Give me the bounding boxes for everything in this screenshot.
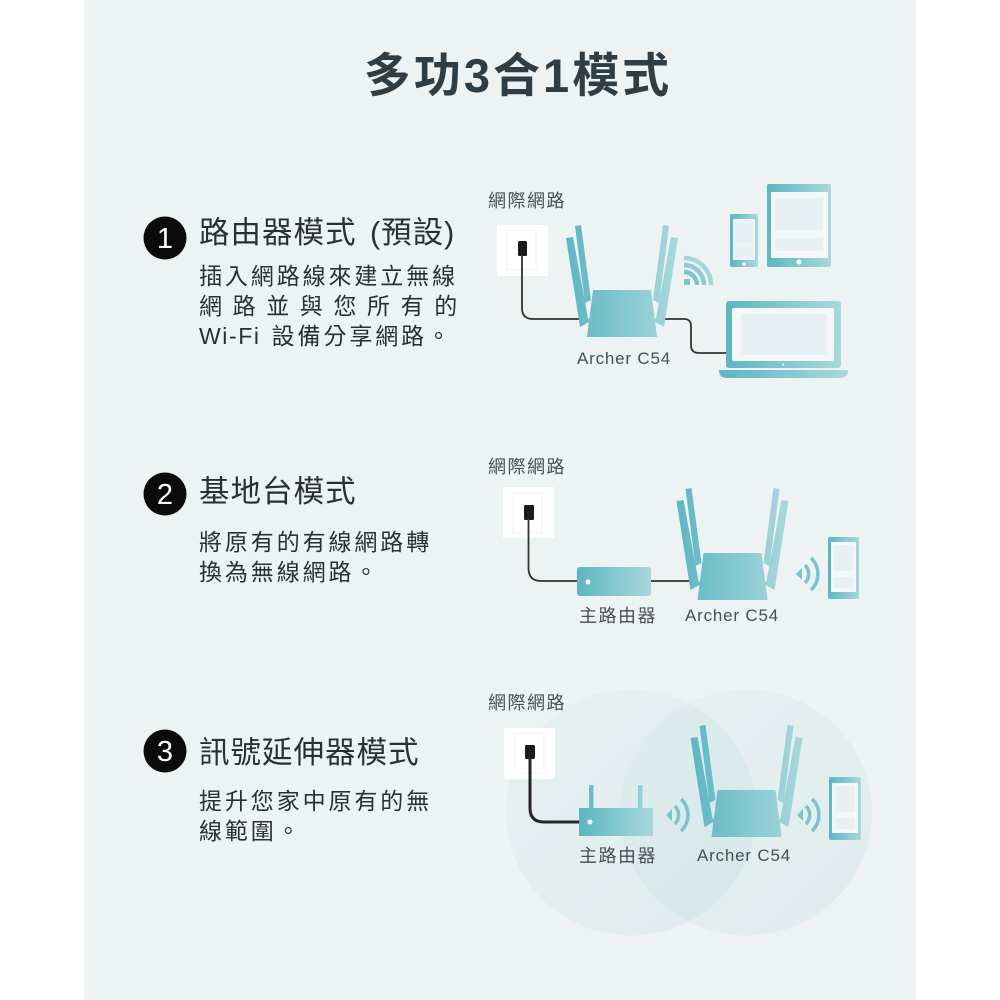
description: access point mode <box>199 529 432 585</box>
description: router mode: 網路並與您所有的 <box>199 293 468 319</box>
badge 2: 2 <box>157 479 173 511</box>
phone <box>730 214 758 267</box>
main router <box>579 785 653 836</box>
cable to router <box>522 255 582 319</box>
description: router mode: 插入網路線來建立無線 <box>199 263 458 289</box>
wifi signal to extender <box>666 799 688 831</box>
laptop <box>719 301 848 378</box>
wall socket <box>503 487 554 538</box>
label: main router: 主路由器 <box>579 606 657 626</box>
panel: router mode text <box>144 216 468 349</box>
main router box <box>577 567 651 596</box>
router <box>690 725 802 837</box>
wifi signal <box>796 558 818 590</box>
wall socket <box>497 225 548 276</box>
label: internet: 網際網路 <box>488 457 566 477</box>
cable to laptop <box>660 319 727 353</box>
coverage circle left <box>506 690 756 936</box>
tablet <box>767 184 831 267</box>
badge 1 <box>144 216 186 260</box>
description: router mode: Wi-Fi 設備分享網路。 <box>199 323 453 349</box>
badge 1: 1 <box>157 223 173 255</box>
diagram: access point mode <box>488 457 859 626</box>
phone <box>828 537 859 599</box>
label: Archer C54: Archer C54 <box>685 606 779 625</box>
coverage circle right <box>620 690 872 936</box>
badge 3 <box>144 730 186 772</box>
diagram: router mode <box>488 184 848 378</box>
title: 多功3合1模式 <box>364 49 672 102</box>
label: Archer C54: Archer C54 <box>577 349 671 368</box>
label: internet: 網際網路 <box>488 191 566 211</box>
heading: range extender mode: 訊號延伸器模式 <box>199 736 420 770</box>
wall socket <box>504 728 555 779</box>
description: access point mode: 換為無線網路。 <box>199 559 380 585</box>
heading: router mode: 路由器模式 (預設) <box>199 216 455 250</box>
description: range extender mode: 提升您家中原有的無 <box>199 788 432 814</box>
wifi signal <box>684 258 711 285</box>
description: access point mode: 將原有的有線網路轉 <box>199 529 432 555</box>
description: range extender mode: 線範圍。 <box>199 818 303 844</box>
heading: access point mode: 基地台模式 <box>199 475 356 509</box>
badge 2 <box>144 472 186 516</box>
cable to main router <box>530 757 579 822</box>
badge 3: 3 <box>157 736 173 768</box>
router <box>566 225 678 337</box>
label: internet: 網際網路 <box>488 693 566 713</box>
router <box>676 488 788 600</box>
phone <box>829 777 861 840</box>
wifi signal to phone <box>797 799 819 831</box>
panel: range extender mode text <box>144 730 432 844</box>
cable to main router <box>528 518 578 581</box>
diagram: range extender mode <box>488 690 872 936</box>
description: range extender mode <box>199 788 432 844</box>
cable between routers <box>651 580 693 582</box>
panel: access point mode text <box>144 472 432 585</box>
label: main router: 主路由器 <box>579 846 657 866</box>
label: Archer C54: Archer C54 <box>697 846 791 865</box>
description: router mode <box>199 263 468 349</box>
